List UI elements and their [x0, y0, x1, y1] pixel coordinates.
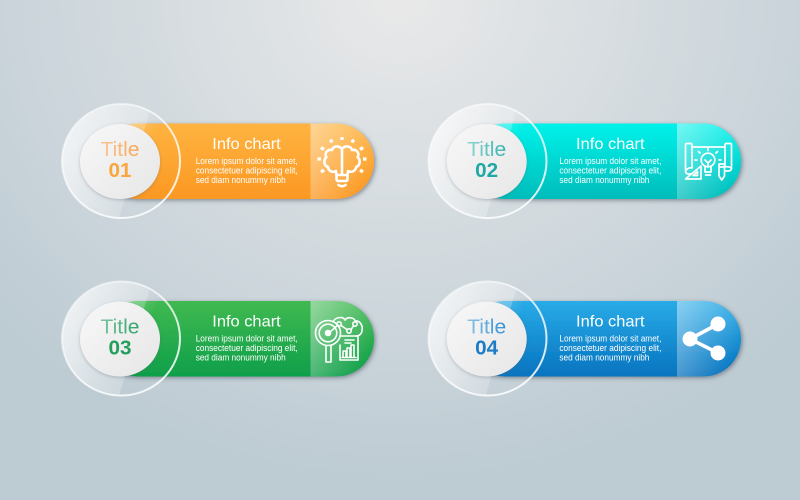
- panel: card 03: [50, 278, 374, 400]
- glass circle: [61, 103, 181, 219]
- disc title: Title: [100, 138, 140, 161]
- icon panel highlight: [310, 301, 374, 376]
- body text: [196, 156, 298, 185]
- icon: data analysis: [316, 318, 362, 362]
- body text: Lorem ipsum dolor sit amet,: [196, 156, 298, 166]
- disc title: Title: [467, 138, 506, 161]
- icon: share: [682, 316, 726, 360]
- icon panel highlight: [310, 124, 374, 199]
- disc number: 03: [108, 336, 132, 360]
- heading: Info chart: [576, 314, 645, 330]
- body text: consectetuer adipiscing elit,: [559, 343, 661, 353]
- green pill: [100, 301, 374, 376]
- body text: sed diam nonummy nibh: [559, 175, 649, 185]
- disc title: Title: [467, 316, 506, 338]
- heading: Info chart: [212, 136, 281, 153]
- body text: Lorem ipsum dolor sit amet,: [559, 156, 661, 166]
- body text: [196, 334, 298, 362]
- inner disc: [447, 302, 527, 376]
- icon panel highlight: [677, 301, 741, 376]
- panel: card 04: [416, 278, 741, 400]
- heading: Info chart: [576, 136, 645, 153]
- blue pill: [467, 301, 741, 376]
- body text: sed diam nonummy nibh: [559, 352, 649, 362]
- icon: blueprint: [686, 144, 732, 180]
- disc number: 04: [475, 336, 499, 360]
- body text: consectetuer adipiscing elit,: [196, 166, 298, 176]
- glass circle: [61, 280, 181, 396]
- body text: [559, 156, 661, 185]
- body text: consectetuer adipiscing elit,: [559, 166, 661, 176]
- inner disc: [80, 302, 160, 376]
- icon panel highlight: [677, 124, 741, 199]
- icon: brain bulb: [318, 137, 366, 186]
- disc number: 02: [475, 159, 498, 182]
- disc title: Title: [100, 316, 140, 338]
- body text: Lorem ipsum dolor sit amet,: [559, 334, 661, 344]
- panel: card 01: [50, 100, 374, 222]
- inner disc: [80, 124, 160, 199]
- body text: [559, 334, 661, 362]
- body text: consectetuer adipiscing elit,: [196, 343, 298, 353]
- disc number: 01: [108, 159, 132, 182]
- body text: sed diam nonummy nibh: [196, 175, 286, 185]
- body text: Lorem ipsum dolor sit amet,: [196, 334, 298, 344]
- cyan pill: [467, 124, 741, 199]
- heading: Info chart: [212, 314, 281, 330]
- panel: card 02: [416, 100, 741, 222]
- body text: sed diam nonummy nibh: [196, 352, 286, 362]
- glass circle: [428, 103, 548, 219]
- glass circle: [428, 280, 548, 396]
- orange pill: [100, 124, 374, 199]
- inner disc: [447, 124, 527, 199]
